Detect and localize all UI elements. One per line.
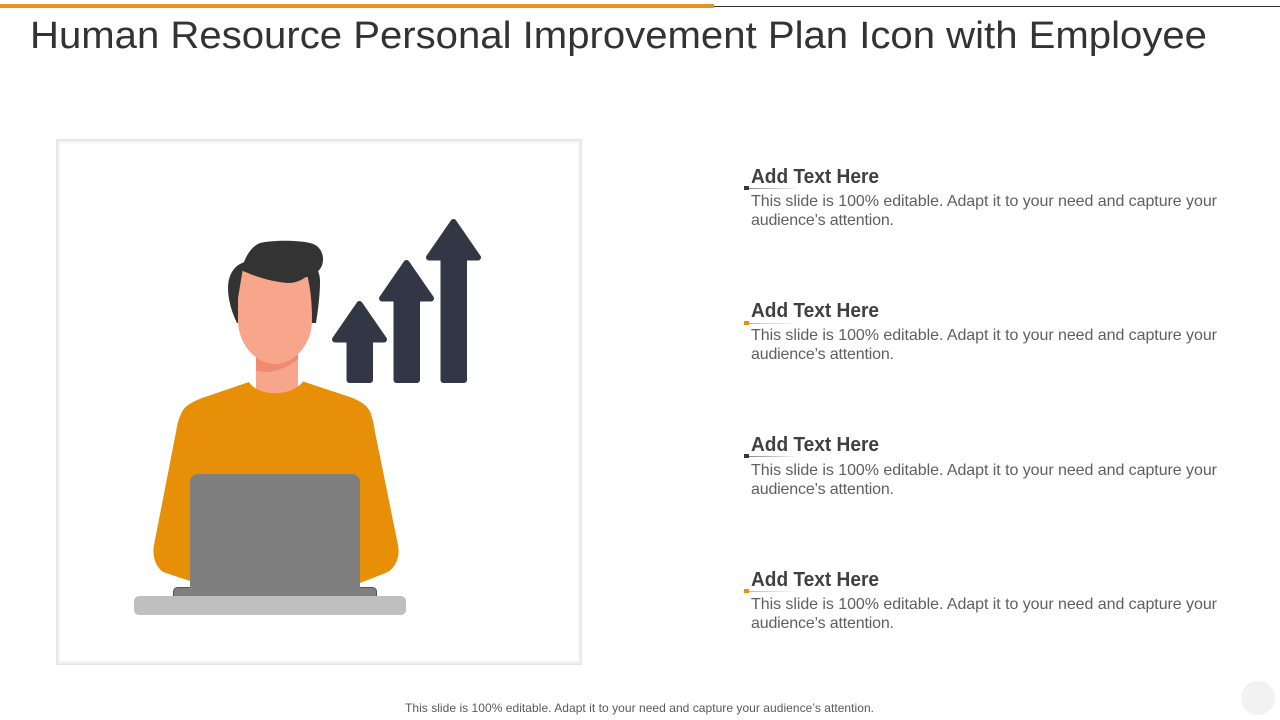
neck shadow: [256, 350, 298, 372]
text block 1: [744, 166, 1218, 229]
text block 1: This slide is 100% editable. Adapt it to your need and capture your: [751, 193, 1218, 210]
panel: illustration frame: [56, 140, 582, 664]
text block 3: [744, 434, 1218, 498]
hair back: [228, 262, 320, 323]
page badge: [1241, 681, 1275, 715]
shirt: [153, 382, 399, 583]
desk: [134, 596, 406, 615]
text block 2: This slide is 100% editable. Adapt it to your need and capture your: [751, 327, 1218, 344]
title: Human Resource Personal Improvement Plan Icon with Employee: [30, 15, 1207, 57]
laptop base: [174, 588, 376, 600]
text block 4: audience’s attention.: [751, 615, 894, 632]
laptop screen: [190, 474, 360, 598]
neck: [256, 345, 298, 395]
face: [238, 268, 312, 364]
text block 1: audience’s attention.: [751, 212, 894, 229]
text block 3: This slide is 100% editable. Adapt it to your need and capture your: [751, 462, 1218, 479]
text block 3: audience’s attention.: [751, 481, 894, 498]
top rule: [0, 4, 1280, 8]
hair top: [241, 241, 323, 283]
text block 4: [744, 569, 1218, 632]
text block 1: Add Text Here: [751, 166, 879, 188]
text block 2: Add Text Here: [751, 300, 879, 322]
text block 2: [744, 300, 1218, 363]
text block 3: Add Text Here: [751, 434, 879, 456]
text block 2: audience’s attention.: [751, 346, 894, 363]
icon: rising arrows: [335, 222, 478, 380]
footer note: This slide is 100% editable. Adapt it to your need and capture your audience’s attention.: [405, 701, 874, 715]
text block 4: Add Text Here: [751, 569, 879, 591]
icon: employee at laptop: [134, 241, 406, 615]
text block 4: This slide is 100% editable. Adapt it to your need and capture your: [751, 596, 1218, 613]
